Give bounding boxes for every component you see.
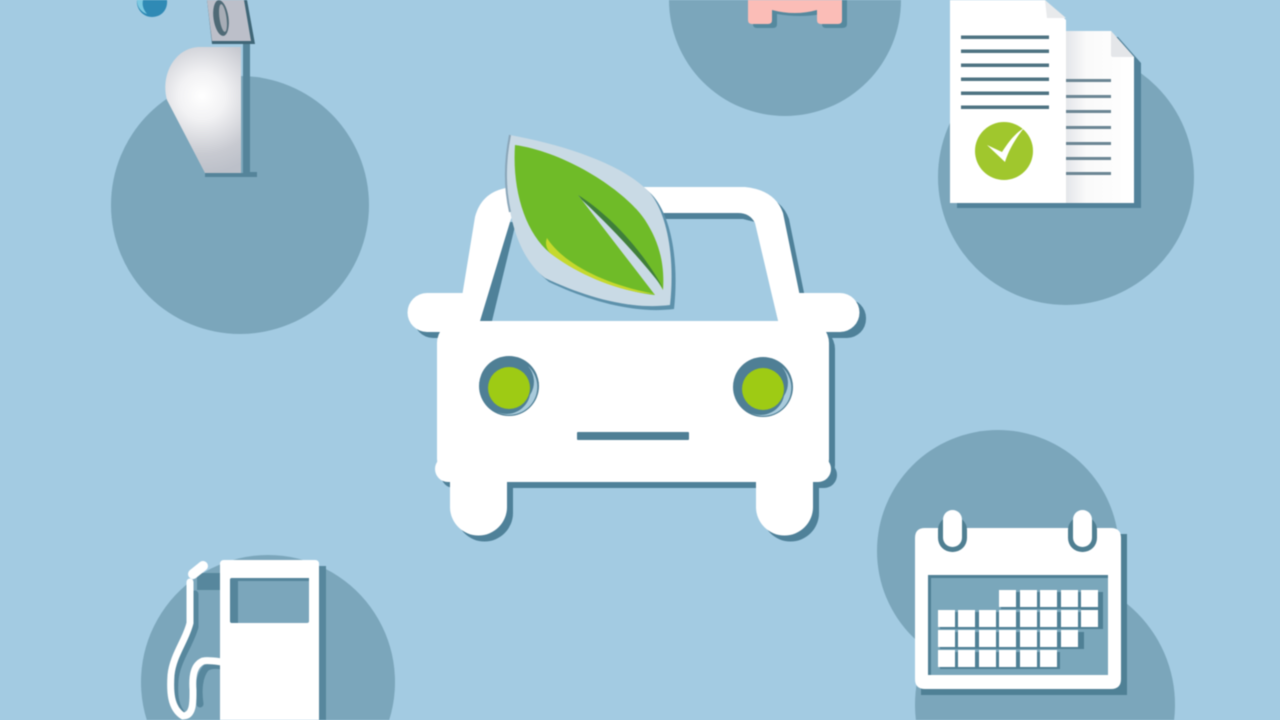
front page lines <box>961 36 1049 109</box>
pump display <box>230 578 309 623</box>
calendar cell shadows <box>940 592 1103 669</box>
calendar shadow <box>921 534 1127 695</box>
front page <box>950 0 1066 203</box>
circle: calendar upper backdrop <box>877 430 1119 672</box>
leaf vein shadow <box>578 195 663 288</box>
check badge <box>975 122 1033 180</box>
icon: piggy bank feet <box>748 0 847 28</box>
nozzle head <box>207 0 255 44</box>
leaf blade <box>515 145 663 295</box>
car body <box>437 321 829 481</box>
icon: fuel pump <box>171 560 326 720</box>
car roof <box>458 187 805 321</box>
leaf <box>506 135 676 310</box>
back page <box>1066 31 1134 203</box>
nozzle stem shadow <box>205 44 257 177</box>
right headlight <box>733 357 793 417</box>
circle: fuel pump backdrop <box>141 555 395 720</box>
circle: nozzle backdrop <box>111 76 369 334</box>
car wheels <box>450 470 507 536</box>
icon: calendar <box>915 510 1127 695</box>
calendar window <box>928 575 1108 675</box>
back page lines <box>1066 79 1111 175</box>
pump hose <box>171 582 222 716</box>
documents shadow <box>957 20 1141 208</box>
calendar ring sockets <box>938 516 967 552</box>
icon: documents with check mark <box>950 0 1141 208</box>
circle: calendar lower backdrop <box>915 575 1175 720</box>
car shadow <box>414 193 866 542</box>
car grille <box>577 432 689 440</box>
car right mirror <box>778 293 859 332</box>
calendar day cells <box>938 590 1098 667</box>
car with leaf <box>408 135 866 542</box>
left headlight <box>479 356 539 416</box>
circle: documents backdrop <box>938 49 1194 305</box>
calendar rings <box>943 510 962 547</box>
leaf outline <box>507 135 672 306</box>
pump shadow <box>220 566 326 720</box>
car left mirror <box>408 293 480 332</box>
circle: piggy backdrop <box>669 0 901 116</box>
car window glass <box>480 218 778 321</box>
pump nozzle <box>193 566 203 574</box>
icon: fuel nozzle <box>137 0 257 177</box>
pump body <box>220 560 319 720</box>
leaf left edge <box>506 135 510 212</box>
fuel drop <box>137 0 167 17</box>
calendar frame <box>915 528 1121 689</box>
leaf shadow <box>511 139 676 310</box>
pump hose shadow <box>175 594 222 716</box>
nozzle body <box>165 47 241 173</box>
leaf highlight <box>546 238 655 294</box>
